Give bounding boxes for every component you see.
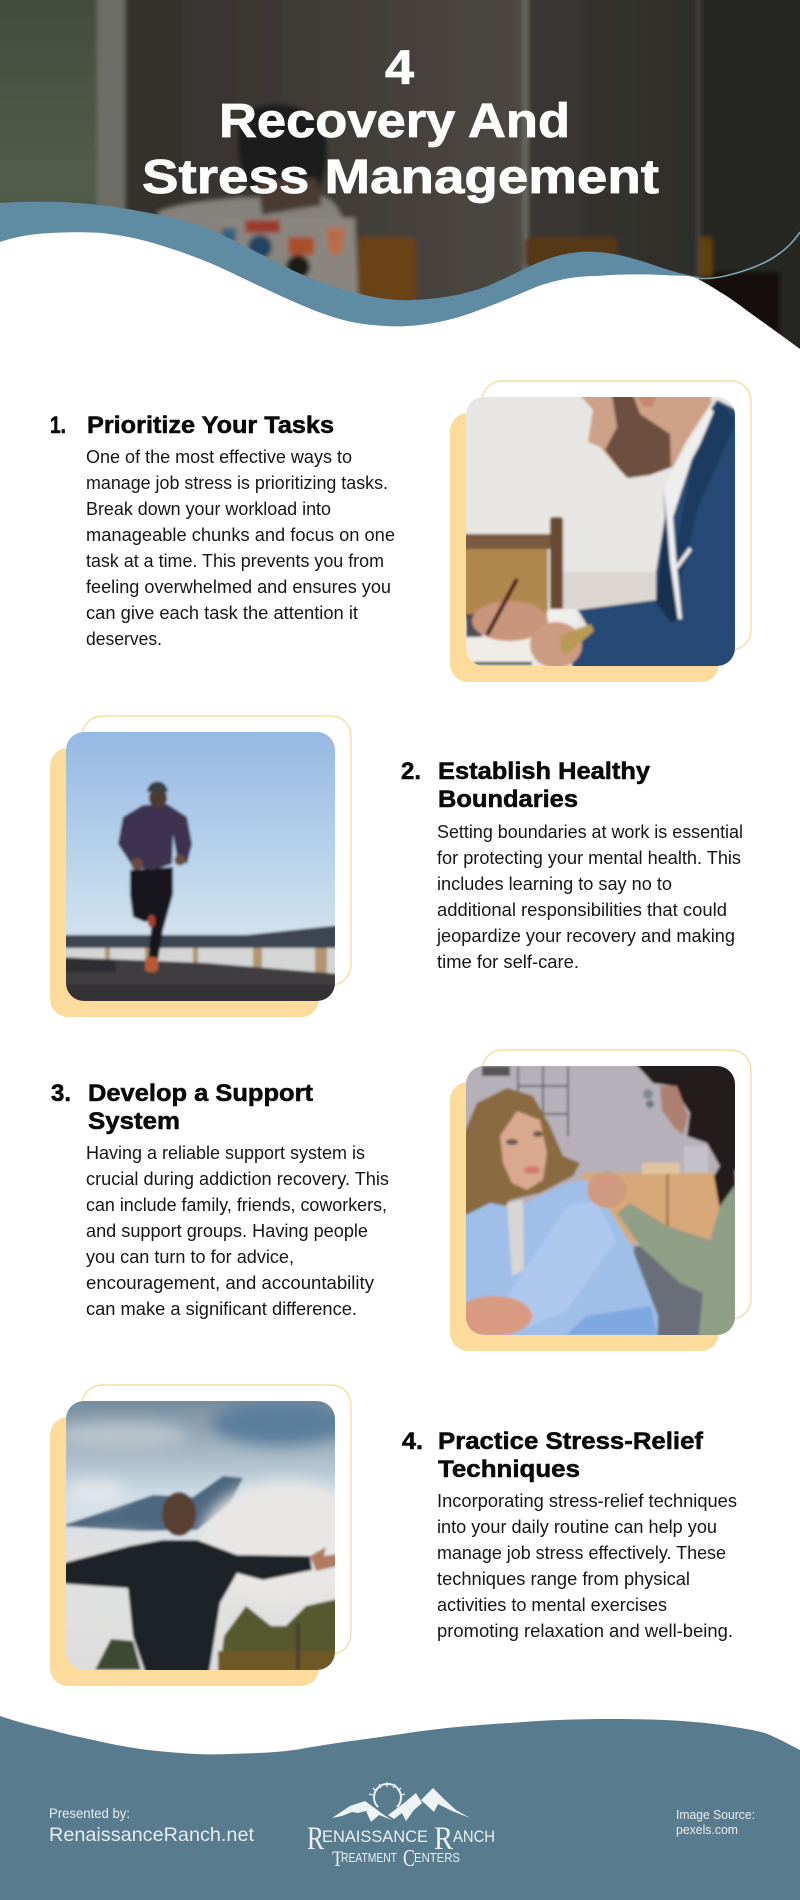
heading: prioritize your tasks: 1.	[50, 412, 66, 439]
heading: practice stress-relief techniques: Techniques	[438, 1456, 580, 1483]
text block: step 3 body: crucial during addiction recovery. This	[86, 1169, 389, 1189]
heading: develop a support system: Develop a Support	[88, 1080, 313, 1107]
text block: step 1 body: manageable chunks and focus on one	[86, 525, 395, 545]
title	[142, 42, 659, 204]
photo: man writing at desk	[466, 397, 735, 666]
text block: step 1 body: deserves.	[86, 629, 162, 649]
logo wordmark: REATMENT	[341, 1850, 397, 1865]
text block: step 3 body: can make a significant difference.	[86, 1299, 357, 1319]
text block: step 1 body	[86, 447, 395, 649]
photo: woman comforting man	[466, 1066, 735, 1335]
header wave: teal band	[0, 202, 699, 340]
text block: step 2 body: for protecting your mental health. This	[437, 848, 741, 868]
heading: establish healthy boundaries: Boundaries	[438, 786, 578, 813]
heading: establish healthy boundaries: Establish Healthy	[438, 758, 650, 785]
text block: step 4 body: Incorporating stress-relief techniques	[437, 1491, 737, 1511]
logo wordmark	[307, 1821, 495, 1872]
heading: develop a support system	[51, 1080, 313, 1135]
presented by text	[49, 1805, 255, 1846]
heading: practice stress-relief techniques: 4.	[402, 1428, 423, 1455]
text block: step 2 body	[436, 822, 743, 972]
logo wordmark: ENAISSANCE	[322, 1827, 428, 1846]
panel: step 2 text	[401, 758, 743, 972]
text block: step 3 body: Having a reliable support system is	[86, 1143, 365, 1163]
header photo: stressed worker at laptop	[0, 0, 800, 370]
text block: step 2 body: time for self-care.	[437, 952, 579, 972]
logo wordmark: R	[434, 1821, 453, 1857]
image source text: Image Source:	[676, 1807, 755, 1822]
text block: step 4 body	[437, 1491, 737, 1641]
text block: step 1 body: One of the most effective ways to	[86, 447, 352, 467]
heading: develop a support system: 3.	[51, 1080, 71, 1107]
logo: renaissance ranch treatment centers	[307, 1782, 495, 1872]
panel: step 4 text	[402, 1428, 737, 1641]
text block: step 2 body: jeopardize your recovery and making	[436, 926, 735, 946]
panel: step 1 photo frame	[450, 381, 751, 682]
text block: step 1 body: can give each task the attention it	[86, 603, 358, 623]
header wave: thin arc line	[693, 232, 800, 279]
logo wordmark: C	[403, 1846, 415, 1872]
text block: step 4 body: promoting relaxation and well-being.	[437, 1621, 733, 1641]
panel: step 4 photo frame	[50, 1384, 352, 1686]
title: Stress Management	[142, 151, 659, 204]
text block: step 1 body: manage job stress is prioritizing tasks.	[86, 473, 388, 493]
text block: step 4 body: manage job stress effectively. These	[437, 1543, 726, 1563]
icon: sun and mountains	[332, 1782, 470, 1822]
panel: step 1 text	[50, 412, 395, 649]
heading: prioritize your tasks: Prioritize Your Tasks	[87, 412, 334, 439]
heading: establish healthy boundaries	[401, 758, 650, 813]
logo wordmark: R	[307, 1821, 324, 1857]
text block: step 4 body: activities to mental exercises	[437, 1595, 667, 1615]
heading: practice stress-relief techniques	[402, 1428, 704, 1483]
text block: step 1 body: task at a time. This prevents you from	[86, 551, 384, 571]
presented by text: Presented by:	[49, 1805, 130, 1821]
text block: step 1 body: Break down your workload into	[86, 499, 331, 519]
image source text: pexels.com	[676, 1822, 738, 1837]
logo wordmark: ENTERS	[414, 1850, 460, 1865]
title: Recovery And	[219, 95, 570, 148]
text block: step 3 body	[86, 1143, 389, 1319]
text block: step 1 body: feeling overwhelmed and ensures you	[86, 577, 391, 597]
heading: develop a support system: System	[88, 1108, 180, 1135]
text block: step 3 body: encouragement, and accountability	[86, 1273, 374, 1293]
photo: runner on road	[66, 732, 335, 1001]
presented by text: RenaissanceRanch.net	[49, 1824, 255, 1846]
panel: step 2 photo frame	[50, 716, 351, 1017]
text block: step 3 body: you can turn to for advice,	[86, 1247, 294, 1267]
text block: step 4 body: techniques range from physical	[437, 1569, 690, 1589]
logo wordmark: ANCH	[453, 1827, 495, 1846]
heading: practice stress-relief techniques: Practice Stress-Relief	[438, 1428, 704, 1455]
title: 4	[385, 42, 414, 95]
logo wordmark: T	[332, 1846, 343, 1871]
text block: step 2 body: Setting boundaries at work is essential	[437, 822, 743, 842]
panel: step 3 text	[51, 1080, 389, 1319]
text block: step 2 body: includes learning to say no to	[437, 874, 672, 894]
photo: man with arms outstretched above clouds	[66, 1401, 335, 1670]
image source text	[676, 1807, 755, 1837]
text block: step 3 body: and support groups. Having people	[86, 1221, 368, 1241]
footer panel	[0, 1716, 800, 1900]
panel: step 3 photo frame	[450, 1050, 751, 1351]
text block: step 3 body: can include family, friends, coworkers,	[86, 1195, 387, 1215]
text block: step 4 body: into your daily routine can help you	[437, 1517, 717, 1537]
heading: establish healthy boundaries: 2.	[401, 758, 421, 785]
text block: step 2 body: additional responsibilities that could	[437, 900, 727, 920]
